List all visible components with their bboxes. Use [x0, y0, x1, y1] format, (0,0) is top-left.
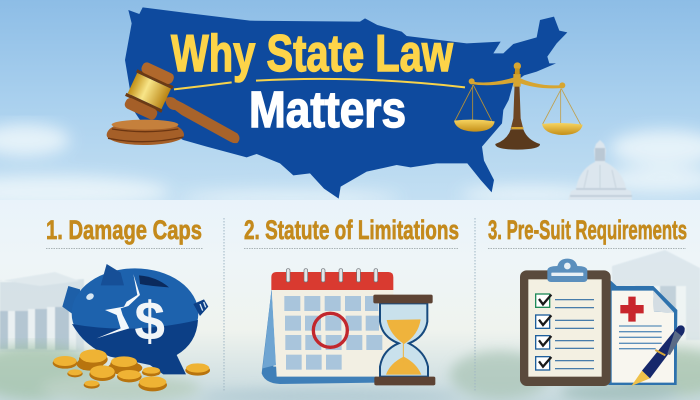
capitol dome background — [568, 140, 632, 200]
clouds — [0, 124, 700, 208]
icon: calendar — [262, 269, 393, 384]
scale arms — [471, 77, 563, 88]
title underline — [174, 79, 465, 89]
icon: clipboard — [520, 259, 611, 386]
sky background — [0, 0, 700, 200]
heading: statute of limitations: 2. Statute of Limitations — [244, 215, 459, 245]
title — [171, 25, 453, 138]
title line 2: Matters — [249, 81, 406, 138]
lower panel wash — [0, 200, 700, 400]
dollar sign: $ — [134, 290, 165, 352]
icon: scales of justice — [454, 62, 583, 150]
icon: pen — [631, 325, 685, 386]
courthouse background left — [0, 272, 84, 352]
icon: cracked piggy bank — [53, 264, 210, 391]
panel: damage caps — [46, 215, 210, 391]
gavel base — [107, 120, 184, 145]
panel: statute of limitations — [244, 215, 459, 385]
title line 1: Why State Law — [171, 25, 453, 83]
gavel head — [121, 60, 178, 122]
scale column — [511, 72, 523, 129]
gold coins — [53, 349, 210, 391]
trees and foliage — [0, 344, 700, 400]
left pan — [454, 85, 495, 132]
column divider 1 — [223, 218, 225, 391]
gavel handle — [165, 97, 239, 143]
panel: pre-suit requirements — [488, 215, 687, 386]
icon: hourglass — [373, 295, 435, 385]
checklist — [536, 294, 550, 370]
US map silhouette — [125, 7, 567, 199]
right pan — [542, 89, 583, 135]
column divider 2 — [474, 218, 476, 391]
icon: medical record — [608, 278, 677, 385]
crack — [97, 274, 140, 338]
courthouse background right — [612, 250, 700, 340]
icon: gavel — [107, 60, 239, 145]
heading: damage caps: 1. Damage Caps — [46, 215, 202, 245]
